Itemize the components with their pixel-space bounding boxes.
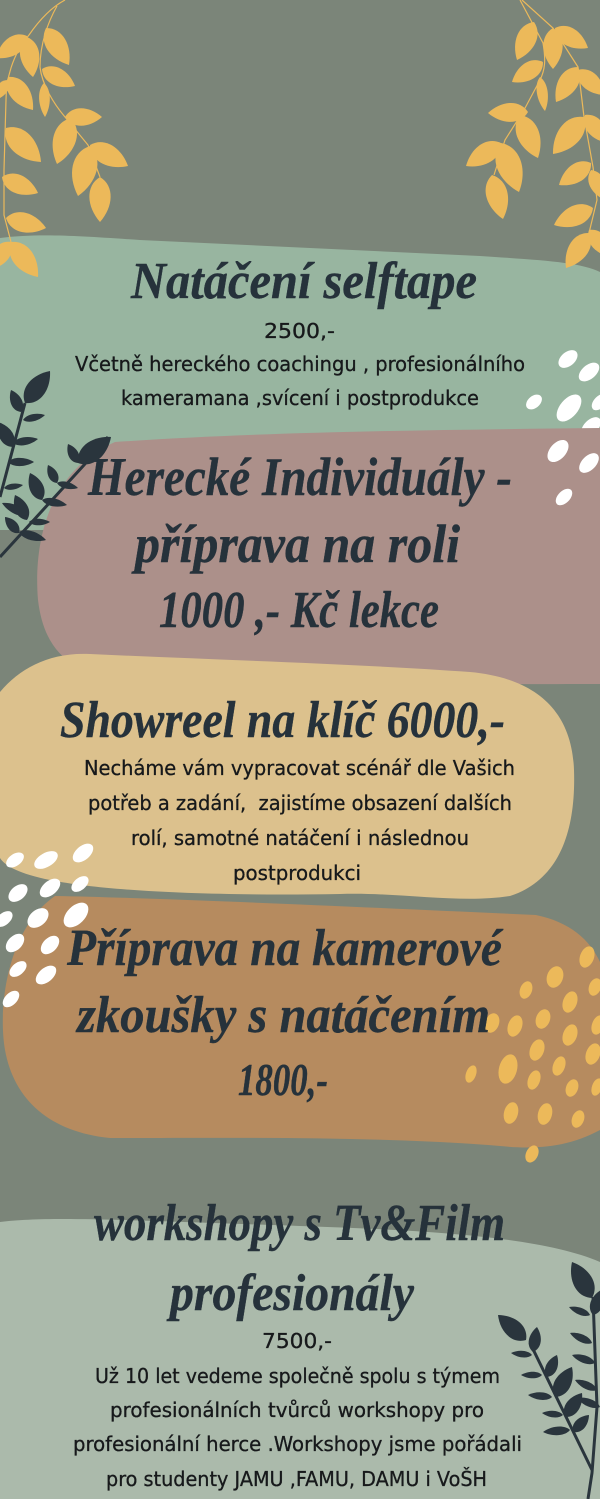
heading: herecké individuály: 1000 ,- Kč lekce [159, 582, 439, 639]
text: showreel description [84, 756, 515, 885]
panel: workshopy [0, 1195, 600, 1499]
text: selftape description: Včetně hereckého coachingu , profesionálního [75, 352, 525, 376]
text: workshopy description: pro studenty JAMU ,FAMU, DAMU i VoŠH [106, 1467, 487, 1491]
text: showreel description: Necháme vám vypracovat scénář dle Vašich [84, 756, 515, 780]
text: selftape description [75, 352, 525, 410]
icon: dark plant left [0, 365, 117, 557]
heading: kamerové zkoušky: zkoušky s natáčením [75, 987, 490, 1044]
panel: herecké individuály [37, 428, 600, 684]
icon: yellow branch top left [0, 0, 133, 283]
text: workshopy description: profesionálních tvůrců workshopy pro [110, 1398, 484, 1422]
text: workshopy description: Už 10 let vedeme společně spolu s týmem [95, 1364, 500, 1388]
text: workshopy description: profesionální herce .Workshopy jsme pořádali [73, 1432, 522, 1456]
panel: showreel [0, 654, 574, 899]
price: workshopy: 7500,- [262, 1329, 332, 1353]
heading: selftape: Natáčení selftape [130, 253, 477, 310]
text: selftape description: kameramana ,svícení i postprodukce [121, 386, 479, 410]
heading: herecké individuály: příprava na roli [131, 514, 460, 574]
decorative white dots left [0, 840, 97, 1010]
heading: herecké individuály [87, 447, 512, 639]
heading: herecké individuály: Herecké Individuály - [87, 447, 512, 507]
icon: dark plant right [492, 1257, 600, 1499]
heading: kamerové zkoušky: Příprava na kamerové [66, 920, 504, 977]
panel: kamerové zkoušky [3, 896, 600, 1165]
heading: workshopy: profesionály [166, 1265, 415, 1322]
text: workshopy description [73, 1364, 522, 1491]
heading: showreel: Showreel na klíč 6000,- [60, 692, 505, 749]
heading: kamerové zkoušky: 1800,- [238, 1054, 328, 1105]
text: showreel description: potřeb a zadání, zajistíme obsazení dalších [88, 791, 512, 815]
decorative white dots top right [523, 347, 600, 440]
text: showreel description: postprodukci [233, 861, 361, 885]
white dots on mauve [543, 436, 600, 508]
price: selftape: 2500,- [264, 319, 335, 343]
heading: workshopy: workshopy s Tv&Film [94, 1195, 505, 1252]
yellow dots [463, 944, 600, 1165]
heading: kamerové zkoušky [66, 920, 504, 1105]
heading: workshopy [94, 1195, 505, 1322]
icon: yellow branch top right [461, 0, 600, 273]
panel: selftape [0, 235, 600, 530]
text: showreel description: rolí, samotné natáčení i následnou [131, 826, 469, 850]
